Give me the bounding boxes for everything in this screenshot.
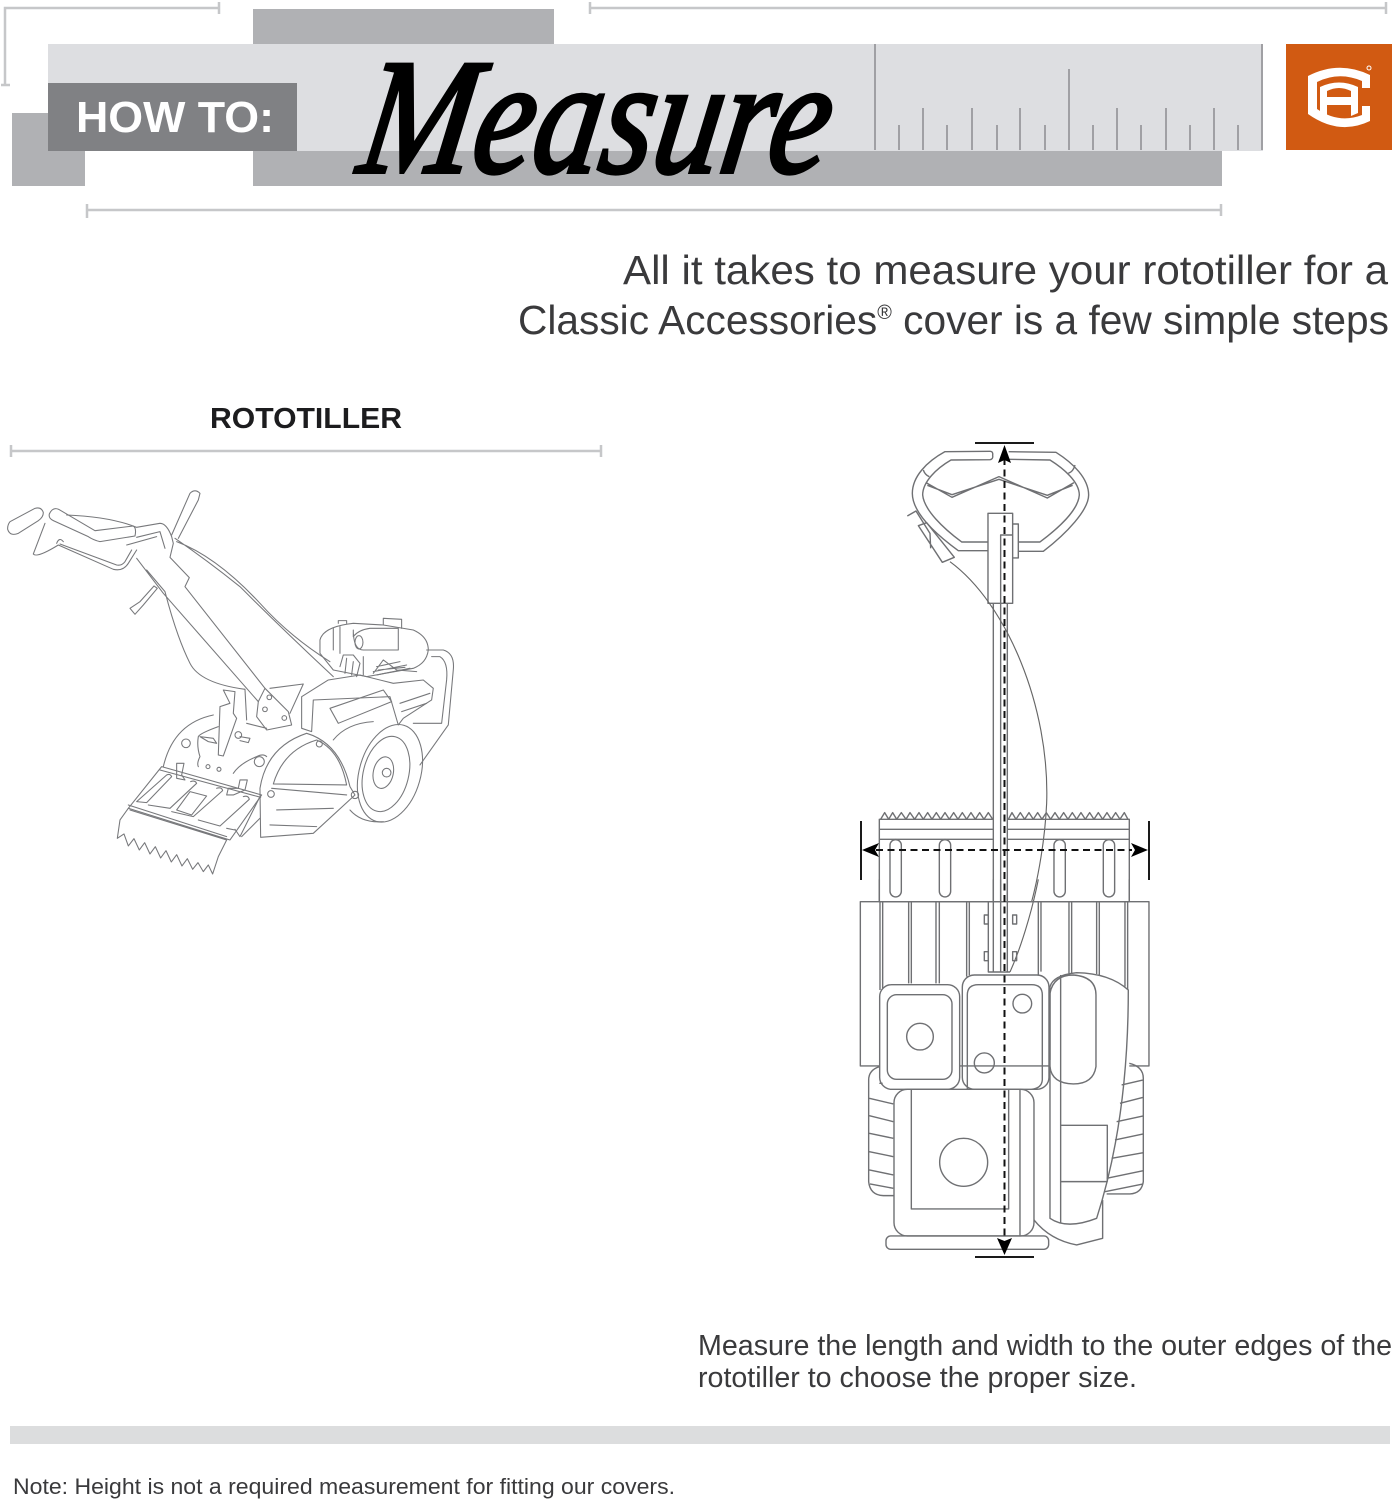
how to label: HOW TO: — [76, 93, 274, 142]
illustration: handlebar and shaft — [879, 451, 1129, 902]
illustration: tines and engine — [860, 879, 1149, 1249]
panel: rototiller side view — [8, 403, 601, 874]
dimension: length arrow — [975, 443, 1034, 1257]
title: Measure: Measure — [348, 26, 847, 208]
illustration: rototiller perspective — [8, 491, 453, 874]
logo: Classic Accessories — [1286, 44, 1392, 150]
instruction text: Measure the length and width to the outer edges of the — [698, 1330, 1392, 1362]
intro text: cover is a few simple steps — [892, 297, 1389, 343]
heading rule — [11, 445, 601, 457]
footnote: Note: Height is not a required measurement for fitting our covers. — [13, 1474, 675, 1499]
intro text — [518, 247, 1389, 343]
instruction text — [698, 1330, 1392, 1394]
dimension brackets — [1, 2, 1386, 218]
ruler ticks — [875, 44, 1262, 150]
heading: rototiller: ROTOTILLER — [210, 403, 402, 435]
instruction text: rototiller to choose the proper size. — [698, 1362, 1137, 1394]
intro text: Classic Accessories — [518, 297, 880, 343]
panel: rototiller top view with dimensions — [860, 443, 1149, 1257]
intro text: All it takes to measure your rototiller for a — [623, 247, 1388, 293]
footer bar — [10, 1426, 1390, 1444]
header grey blocks — [12, 9, 1263, 186]
dimension: width arrow — [861, 821, 1149, 880]
intro text: ® — [877, 302, 892, 324]
how to label — [48, 83, 297, 151]
header banner — [1, 2, 1392, 218]
